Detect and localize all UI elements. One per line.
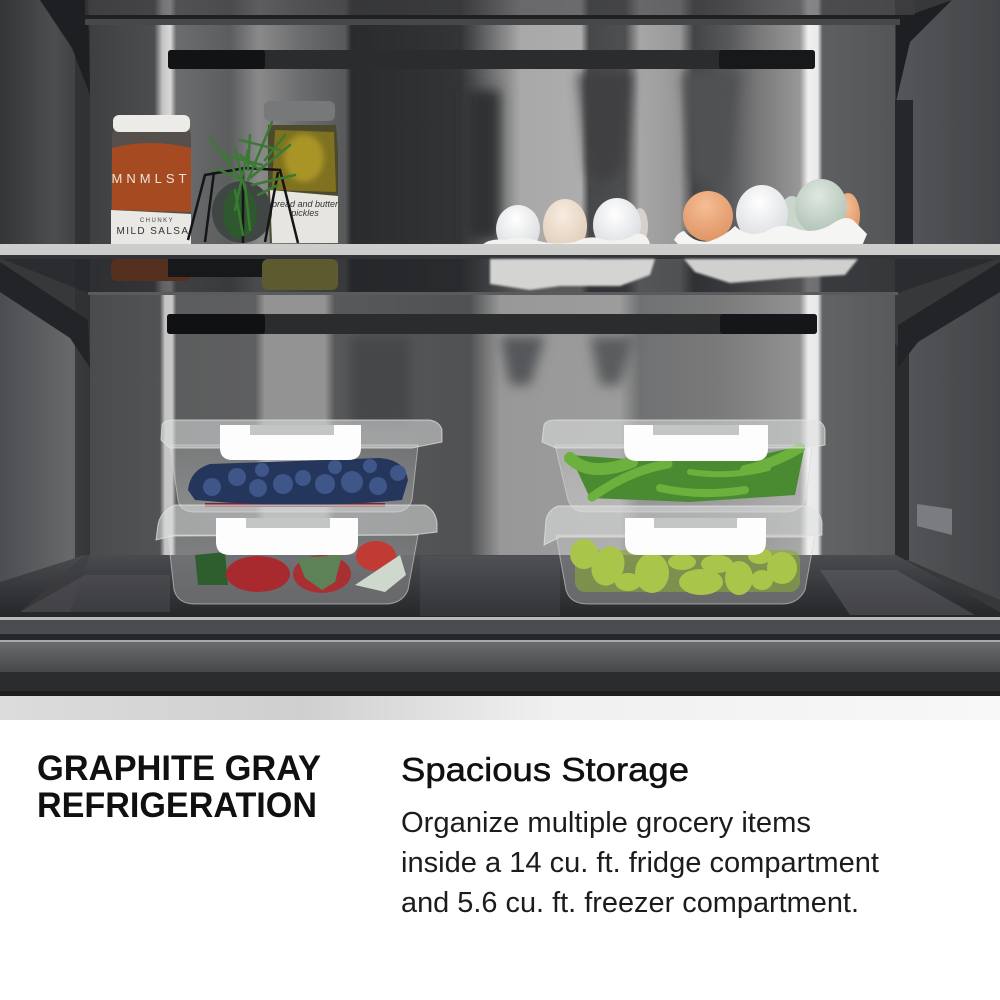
body text — [401, 807, 879, 919]
container: blueberries — [161, 420, 442, 512]
subheading: Spacious Storage — [401, 751, 689, 788]
reflection: cartons — [490, 259, 858, 290]
pickle jar: bread and butter — [272, 199, 339, 209]
bottom text panel — [0, 720, 1000, 1000]
black rail: upper — [168, 50, 815, 69]
title: REFRIGERATION — [37, 786, 317, 825]
fridge interior photo — [0, 0, 1000, 720]
glass shelf — [0, 244, 1000, 295]
title — [37, 749, 321, 825]
pickle jar: pickles — [290, 208, 319, 218]
salsa jar: CHUNKY — [140, 218, 174, 224]
container: strawberries — [156, 505, 437, 604]
title: GRAPHITE GRAY — [37, 749, 321, 788]
black rail: lower — [167, 314, 817, 334]
outlet on right wall — [917, 504, 952, 535]
pickle jar — [264, 101, 339, 243]
salsa jar: MILD SALSA — [117, 226, 189, 237]
container: snap peas — [542, 420, 825, 512]
body text: and 5.6 cu. ft. freezer compartment. — [401, 887, 859, 919]
body text: Organize multiple grocery items — [401, 807, 811, 839]
floor — [0, 555, 1000, 620]
left egg carton — [482, 198, 650, 253]
top shelf edge — [85, 0, 915, 15]
right egg carton — [674, 179, 867, 248]
rosemary plant — [188, 122, 298, 243]
container: grapes — [544, 506, 822, 604]
body text: inside a 14 cu. ft. fridge compartment — [401, 847, 879, 879]
side walls — [0, 0, 90, 260]
reflection: jars — [111, 259, 338, 290]
salsa jar — [111, 115, 191, 245]
salsa jar: MNMLST — [112, 171, 190, 186]
